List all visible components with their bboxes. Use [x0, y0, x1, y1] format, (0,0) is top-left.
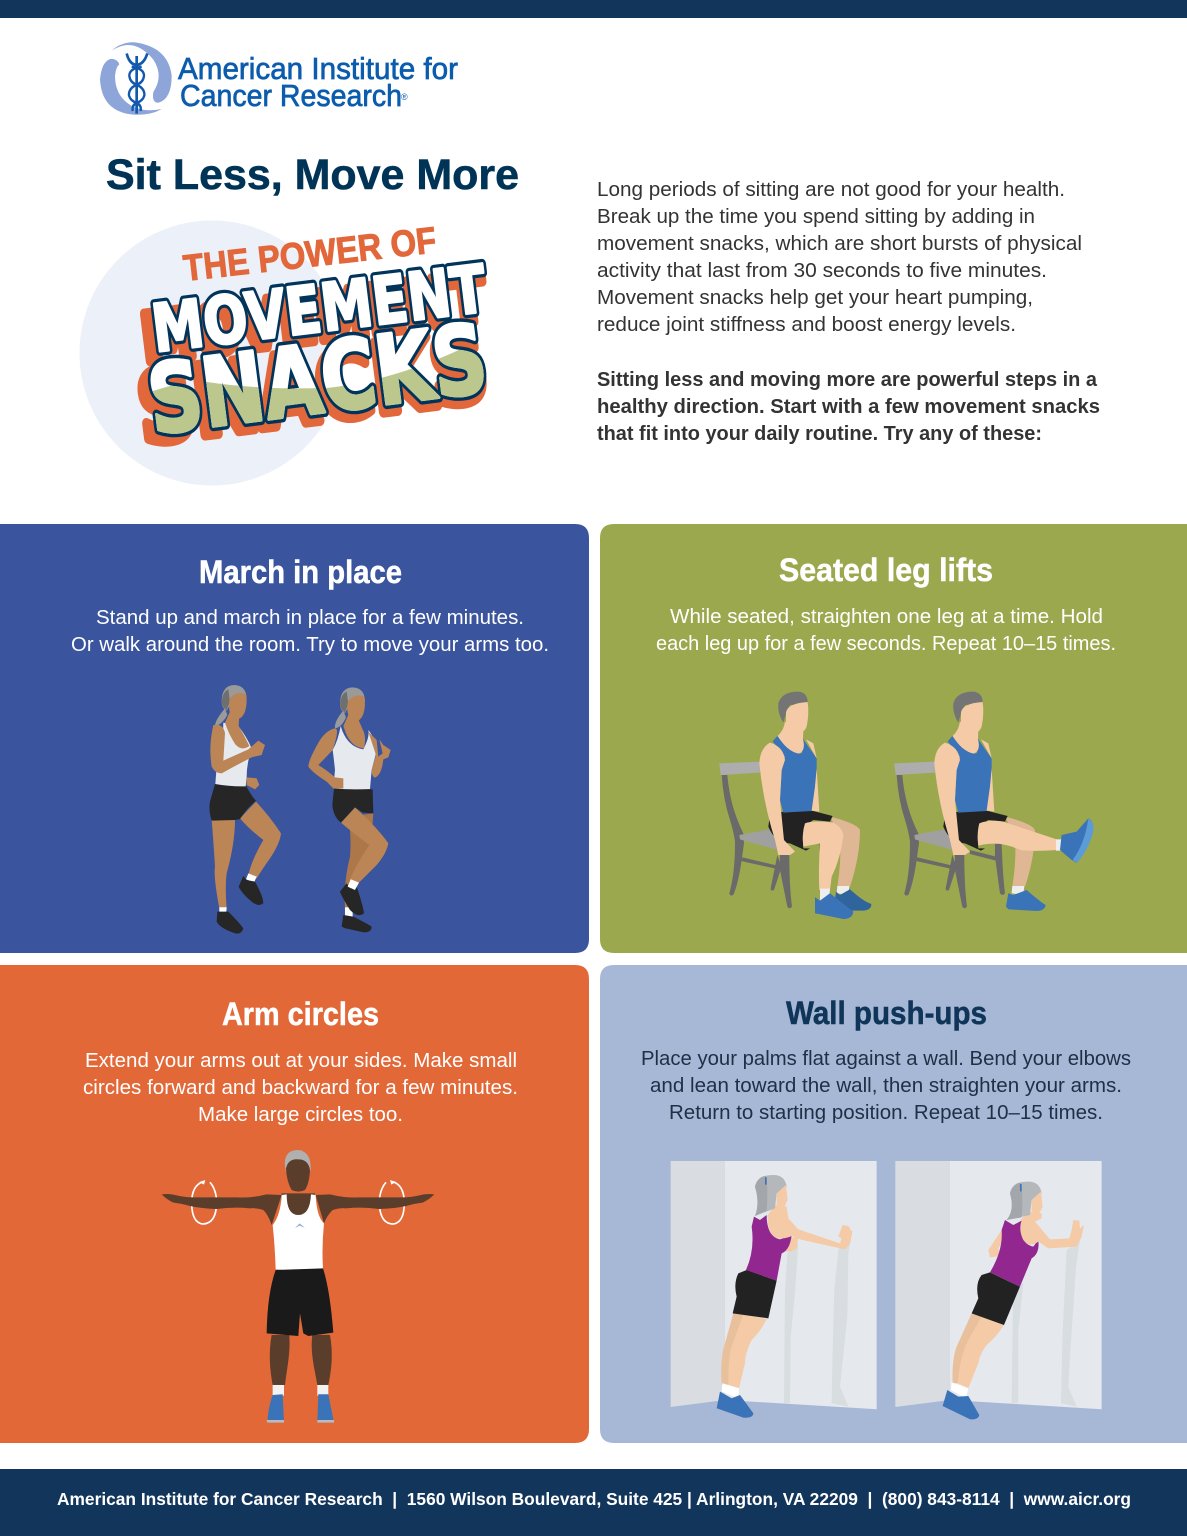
panel: march in place — [0, 524, 589, 953]
snacks shadow: SNACKS — [132, 310, 493, 466]
panel heading: Wall push-ups — [786, 995, 987, 1031]
panel text: Return to starting position. Repeat 10–15 times. — [669, 1102, 1103, 1124]
panel text — [656, 606, 1116, 655]
logo wordmark line 1: American Institute for — [178, 51, 458, 86]
movement shadow: MOVEMENT — [138, 259, 489, 378]
the power of: THE POWER OF — [181, 219, 438, 289]
logo wordmark line 2: Cancer Research — [180, 78, 402, 113]
panel: arm circles — [0, 965, 589, 1443]
panel text — [71, 607, 549, 656]
intro bold paragraph: that fit into your daily routine. Try any of these: — [597, 423, 1042, 445]
panel text — [83, 1050, 518, 1126]
panel background — [600, 524, 1187, 953]
panel text: Make large circles too. — [198, 1104, 403, 1126]
illustration: seated man, leg lifted — [894, 692, 1094, 911]
registered mark: ® — [401, 92, 408, 102]
panel heading: Seated leg lifts — [779, 552, 993, 588]
panel text — [641, 1048, 1131, 1124]
illustration: marching woman, first pose — [209, 685, 281, 934]
intro paragraph: Long periods of sitting are not good for your health. — [597, 179, 1065, 201]
title graphic: The Power of Movement Snacks — [80, 219, 493, 486]
panel background — [0, 524, 589, 953]
panel background — [600, 965, 1187, 1443]
panel: wall push-ups — [600, 965, 1187, 1443]
top bar — [0, 0, 1187, 18]
panel text: Extend your arms out at your sides. Make small — [85, 1050, 517, 1072]
snacks green fill: SNACKS — [142, 303, 493, 457]
main heading: Sit Less, Move More — [106, 151, 519, 199]
panel heading: Arm circles — [222, 996, 379, 1032]
intro bold paragraph: healthy direction. Start with a few movement snacks — [597, 396, 1100, 418]
logo emblem — [100, 42, 172, 115]
illustration: man with arms out and rotation arrows — [162, 1150, 434, 1423]
illustration: woman at wall, arms bent — [895, 1161, 1102, 1419]
intro paragraph: movement snacks, which are short bursts of physical — [597, 233, 1082, 255]
footer — [0, 1469, 1187, 1536]
snacks outline: SNACKS — [142, 303, 493, 457]
movement fill: MOVEMENT — [148, 251, 490, 368]
panel text: each leg up for a few seconds. Repeat 10–15 times. — [656, 633, 1116, 655]
panel text: Stand up and march in place for a few minutes. — [96, 607, 524, 629]
background circle — [80, 220, 344, 486]
snacks white fill: SNACKS — [142, 303, 493, 457]
rotation arrow left — [192, 1180, 217, 1224]
illustration: woman at wall, arms straight — [671, 1161, 877, 1418]
panel text: and lean toward the wall, then straighten your arms. — [650, 1075, 1122, 1097]
illustration: marching woman, second pose — [308, 687, 391, 932]
logo: American Institute for Cancer Research — [100, 42, 458, 115]
rotation arrow right — [379, 1180, 404, 1224]
panel text: While seated, straighten one leg at a time. Hold — [670, 606, 1103, 628]
intro paragraph: activity that last from 30 seconds to five minutes. — [597, 260, 1047, 282]
intro paragraph — [597, 179, 1082, 336]
panel: seated leg lifts — [600, 524, 1187, 953]
panel text: Or walk around the room. Try to move your arms too. — [71, 634, 549, 656]
intro bold paragraph: Sitting less and moving more are powerful steps in a — [597, 369, 1098, 391]
panel background — [0, 965, 589, 1443]
intro paragraph: reduce joint stiffness and boost energy levels. — [597, 314, 1016, 336]
movement outline: MOVEMENT — [148, 251, 490, 368]
intro paragraph: Break up the time you spend sitting by adding in — [597, 206, 1035, 228]
illustration: seated man, both feet down — [719, 692, 871, 919]
panel text: circles forward and backward for a few minutes. — [83, 1077, 518, 1099]
intro bold paragraph — [597, 369, 1100, 445]
panel heading: March in place — [199, 554, 402, 590]
footer text: American Institute for Cancer Research | 1560 Wilson Boulevard, Suite 425 | Arlington, VA 22209 | (800) 843-8114 | www.aicr.org — [57, 1489, 1131, 1509]
intro text — [597, 179, 1100, 445]
panel text: Place your palms flat against a wall. Bend your elbows — [641, 1048, 1131, 1070]
footer bar — [0, 1469, 1187, 1536]
intro paragraph: Movement snacks help get your heart pumping, — [597, 287, 1033, 309]
